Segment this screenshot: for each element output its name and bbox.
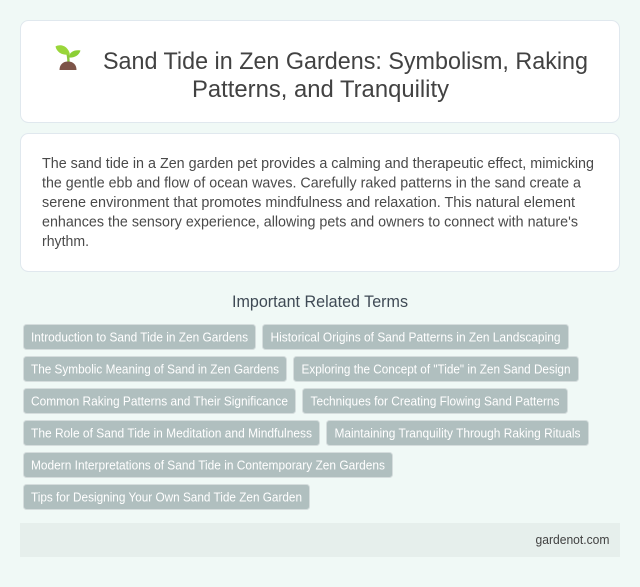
tag: Historical Origins of Sand Patterns in Zen Landscaping (270, 330, 560, 344)
description text: the gentle ebb and flow of ocean waves. Carefully raked patterns in the sand create a (42, 176, 582, 192)
title (103, 48, 588, 103)
tag: Tips for Designing Your Own Sand Tide Zen Garden (31, 490, 302, 504)
tag (24, 420, 320, 446)
tag: Maintaining Tranquility Through Raking Rituals (334, 426, 580, 440)
tag (24, 452, 392, 478)
tag: Exploring the Concept of "Tide" in Zen Sand Design (302, 362, 570, 376)
tag (24, 388, 296, 414)
footer (20, 523, 620, 557)
tag (326, 420, 588, 446)
tag (24, 484, 310, 510)
tag: Introduction to Sand Tide in Zen Gardens (31, 330, 248, 344)
tag (24, 324, 256, 350)
tag: The Role of Sand Tide in Meditation and Mindfulness (31, 426, 312, 440)
panel: description (20, 134, 620, 272)
tag (302, 388, 568, 414)
tag: Techniques for Creating Flowing Sand Patterns (310, 394, 560, 408)
tag (24, 356, 286, 382)
footer: gardenot.com (536, 533, 610, 547)
tag (294, 356, 578, 382)
related terms tags (24, 324, 588, 510)
tag: The Symbolic Meaning of Sand in Zen Gardens (31, 362, 279, 376)
description text: enhances the sensory experience, allowing pets and owners to connect with nature's (42, 214, 578, 230)
title: Patterns, and Tranquility (192, 76, 450, 103)
heading: related terms: Important Related Terms (232, 293, 408, 311)
tag: Common Raking Patterns and Their Significance (31, 394, 288, 408)
description text (42, 156, 594, 250)
description text: serene environment that promotes mindfulness and relaxation. This natural element (42, 195, 575, 211)
description text: rhythm. (42, 234, 89, 250)
description text: The sand tide in a Zen garden pet provides a calming and therapeutic effect, mimicking (42, 156, 594, 172)
tag: Modern Interpretations of Sand Tide in Contemporary Zen Gardens (31, 458, 385, 472)
icon: seedling (56, 45, 80, 70)
panel: title card (20, 20, 620, 122)
tag (262, 324, 568, 350)
title: Sand Tide in Zen Gardens: Symbolism, Raking (103, 48, 588, 75)
